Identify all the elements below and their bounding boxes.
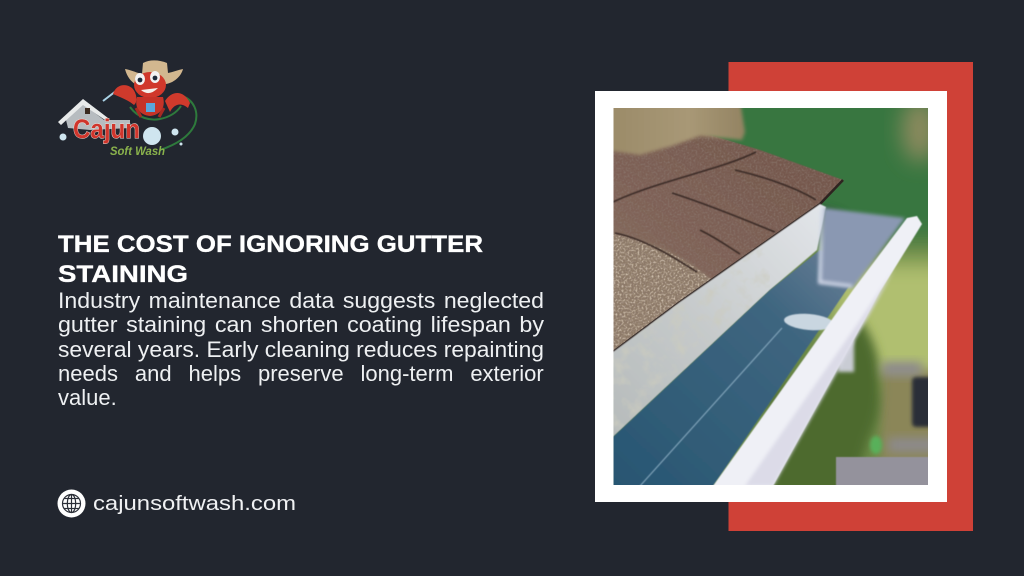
logo: crawfish mascot (113, 71, 190, 117)
photo: gutter seam highlight (640, 328, 782, 486)
photo: gutter on roof edge (614, 108, 928, 485)
body text: Industry maintenance data suggests neglected (58, 288, 544, 313)
heading: STAINING (58, 261, 188, 288)
photo: burlap sack (614, 108, 747, 156)
photo: stained fascia board (613, 204, 826, 437)
website link (58, 490, 296, 518)
logo: green hose (130, 96, 196, 150)
photo: reflection in gutter (784, 313, 832, 331)
red backing panel (728, 62, 973, 531)
logo: Soft Wash wordmark: Soft Wash (110, 144, 165, 158)
heading (58, 231, 483, 288)
logo: Cajun Soft Wash (58, 60, 196, 158)
photo: white gutter lip (713, 216, 922, 486)
logo: Cajun wordmark: Cajun (73, 114, 140, 144)
body text (58, 288, 544, 410)
body text: gutter staining can shorten coating lifespan by (58, 312, 544, 337)
body text: several years. Early cleaning reduces repainting (58, 337, 544, 362)
photo: gutter channel (613, 250, 860, 486)
photo: blurred garden background (614, 108, 928, 485)
icon: globe (58, 490, 86, 518)
logo: cowboy hat (125, 60, 183, 86)
body text: value. (58, 385, 117, 410)
white photo frame (595, 91, 947, 502)
logo: soap bubbles (60, 127, 182, 146)
body text: needs and helps preserve long-term exterior (58, 361, 544, 386)
logo: house (58, 99, 130, 130)
website address: cajunsoftwash.com (93, 492, 296, 515)
photo: roof shingles (605, 132, 843, 358)
heading: THE COST OF IGNORING GUTTER (58, 231, 483, 258)
photo: gutter end cap (818, 208, 905, 288)
logo: spray wand (103, 91, 116, 101)
